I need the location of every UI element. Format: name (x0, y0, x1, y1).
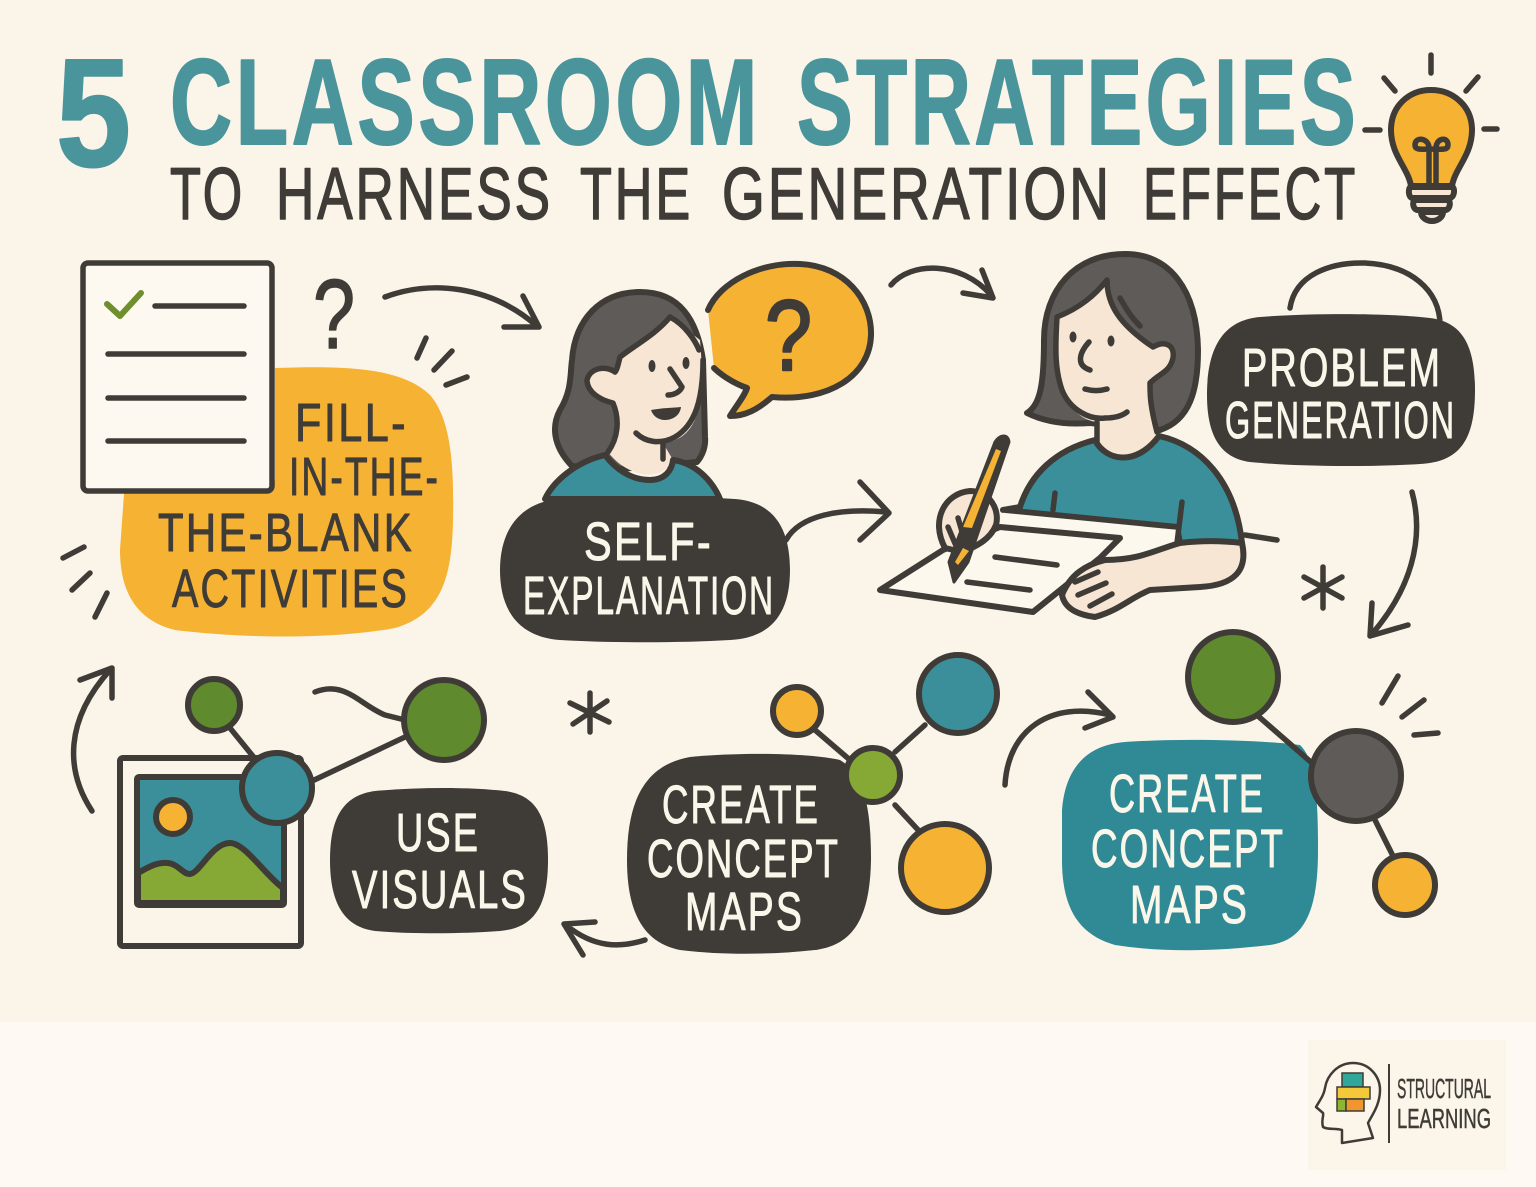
panel: fill-in-the-blank activities (63, 259, 467, 636)
label box (500, 497, 790, 642)
desk surface (1000, 510, 1177, 560)
arrow: to use visuals (564, 922, 645, 955)
node network (188, 679, 484, 823)
logo: Structural Learning (1308, 1040, 1506, 1170)
title: CLASSROOM (170, 34, 761, 170)
title (56, 27, 1359, 199)
label text (352, 803, 528, 920)
arc connector (1290, 263, 1440, 325)
label text: CREATE (1109, 764, 1265, 824)
title: 5 (56, 27, 131, 199)
label text: FILL- (295, 393, 408, 453)
speech bubble with question mark (708, 264, 871, 416)
label text: CONCEPT (647, 829, 840, 889)
label text: PROBLEM (1242, 338, 1442, 398)
label text (1091, 764, 1285, 935)
wordmark (1397, 1073, 1491, 1134)
label text (1225, 338, 1456, 450)
label text: THE-BLANK (158, 503, 414, 563)
arrow: to self-explanation (385, 288, 539, 327)
panel: problem generation (1207, 263, 1475, 466)
label box (1207, 314, 1475, 466)
panel: student writing (880, 254, 1277, 617)
label box (627, 754, 871, 954)
paper (880, 527, 1120, 612)
label text (158, 393, 440, 619)
label text: SELF- (584, 512, 713, 572)
yellow label shape (120, 367, 453, 636)
subtitle: THE (580, 154, 693, 235)
icon: question mark: ? (313, 259, 355, 369)
subtitle: GENERATION (722, 154, 1112, 235)
icon: asterisk middle (570, 693, 609, 732)
shirt (1003, 436, 1242, 543)
picture frame (120, 758, 301, 946)
subtitle: TO (170, 154, 245, 235)
label text: EXPLANATION (523, 566, 775, 626)
label text (523, 512, 775, 626)
label text: USE (396, 803, 480, 863)
wordmark: LEARNING (1397, 1103, 1491, 1134)
face (1056, 280, 1173, 457)
speech bubble with question mark: ? (765, 280, 812, 392)
panel: create concept maps teal (1062, 632, 1438, 950)
label box (330, 788, 548, 933)
node network (1188, 632, 1435, 915)
right arm and hand (1062, 541, 1243, 617)
burst marks (63, 338, 467, 617)
arrow: up to fill-in-the-blank (74, 668, 112, 811)
arrow: to teal concept maps (1005, 692, 1113, 785)
icon: worksheet (83, 263, 272, 491)
label text: VISUALS (352, 860, 528, 920)
panel: self-explanation (500, 264, 871, 642)
label text: CONCEPT (1091, 819, 1285, 879)
arrow: to writing student (786, 482, 889, 540)
head icon (1316, 1063, 1380, 1143)
icon: asterisk right (1304, 567, 1342, 608)
label text: CREATE (662, 775, 820, 835)
arrow: to student (891, 268, 993, 298)
subtitle (170, 154, 1358, 235)
hair (1027, 254, 1198, 430)
label text (647, 775, 840, 942)
subtitle: HARNESS (276, 154, 553, 235)
label text: MAPS (1130, 875, 1249, 935)
icon: light bulb (1365, 55, 1497, 221)
burst marks (1382, 676, 1438, 735)
panel: create concept maps dark (627, 655, 997, 954)
subtitle: EFFECT (1143, 154, 1358, 235)
left hand (939, 491, 997, 552)
label text: ACTIVITIES (172, 559, 409, 619)
node network (773, 655, 997, 912)
panel: use visuals (120, 679, 548, 946)
label box (1062, 740, 1318, 950)
arrow: down to concept maps (1370, 492, 1417, 636)
pencil (948, 436, 1009, 582)
node links (815, 725, 925, 832)
label text: IN-THE- (289, 447, 440, 507)
person speaking (545, 292, 720, 499)
label text: MAPS (685, 882, 804, 942)
